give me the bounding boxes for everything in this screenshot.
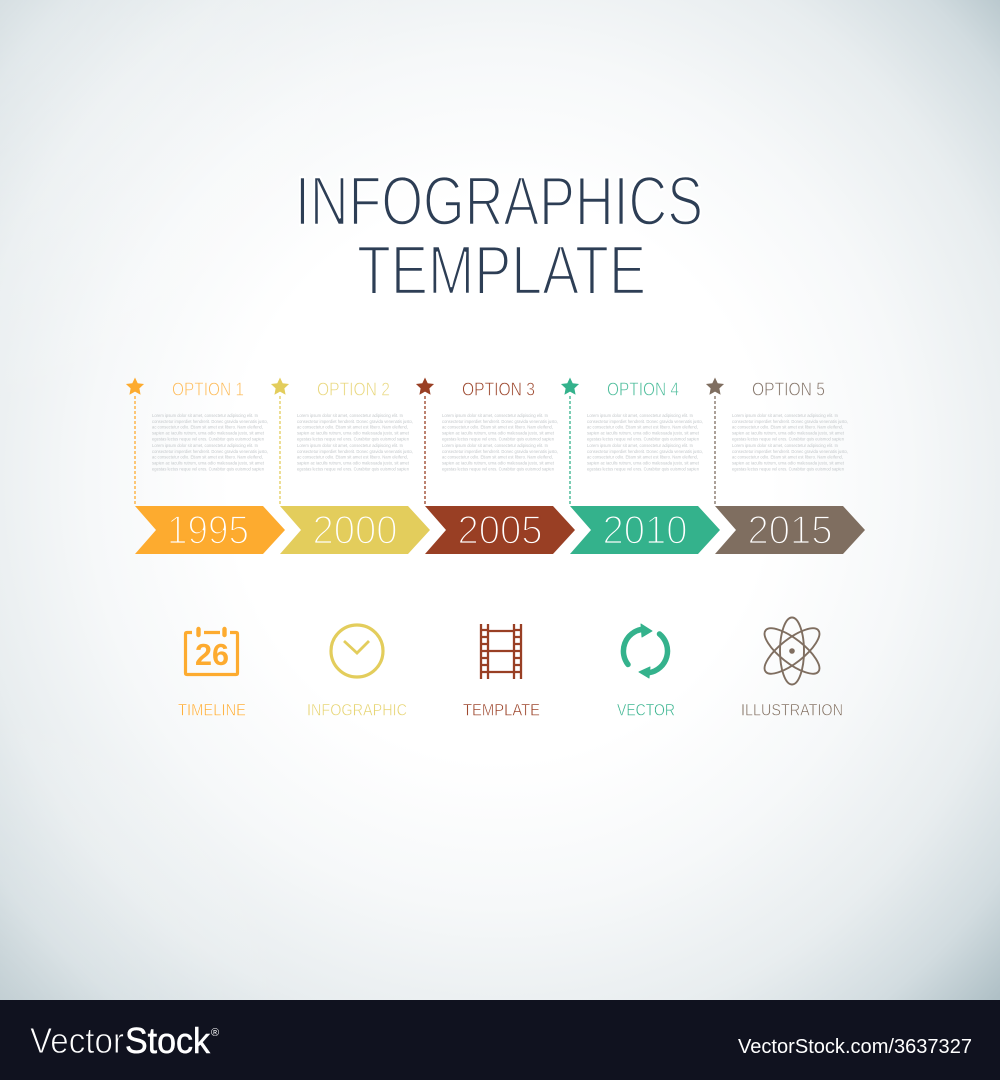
icon: refresh arrows (623, 624, 668, 678)
text block 1: sapien ac iaculis rutrum, urna odio malesuada justo, sit amet (152, 430, 265, 436)
footer logo: Stock (125, 1020, 211, 1061)
panel: option 1 1995 (126, 378, 285, 554)
arrow 2005: 2005 (458, 509, 542, 553)
text block 1: consectetur imperdiet hendrerit. Donec gravida venenatis justo, (152, 419, 268, 424)
text block 4: ac consectetur odio. Etiam sit amet est libero. Nam eleifend, (587, 424, 698, 430)
footer bar (0, 1000, 1000, 1080)
text block 3: Lorem ipsum dolor sit amet, consectetur adipiscing elit. In (442, 443, 548, 448)
heading: option 2: OPTION 2 (317, 379, 390, 399)
connector with star 1 (126, 378, 144, 506)
panel: option 4 2010 (561, 378, 720, 554)
text block 2: egestas lectus neque vel eros. Curabitur quis euismod sapien (297, 436, 409, 442)
text block 5: consectetur imperdiet hendrerit. Donec gravida venenatis justo, (732, 419, 848, 424)
connector with star 4 (561, 378, 579, 506)
panel: option 3 2005 (416, 378, 575, 554)
text block 1 (152, 413, 268, 472)
panel: option 2 2000 (271, 378, 430, 554)
text block 5 (732, 413, 848, 472)
arrow 1995 (135, 506, 285, 554)
text block 2: consectetur imperdiet hendrerit. Donec gravida venenatis justo, (297, 419, 413, 424)
text block 2: ac consectetur odio. Etiam sit amet est libero. Nam eleifend, (297, 424, 408, 430)
text block 4: egestas lectus neque vel eros. Curabitur quis euismod sapien (587, 466, 699, 472)
text block 1: consectetur imperdiet hendrerit. Donec gravida venenatis justo, (152, 449, 268, 454)
text block 5: egestas lectus neque vel eros. Curabitur quis euismod sapien (732, 436, 844, 442)
label: illustration: ILLUSTRATION (741, 701, 843, 719)
text block 3: Lorem ipsum dolor sit amet, consectetur adipiscing elit. In (442, 413, 548, 418)
text block 2: sapien ac iaculis rutrum, urna odio malesuada justo, sit amet (297, 460, 410, 466)
heading: option 5: OPTION 5 (752, 379, 825, 399)
text block 4: ac consectetur odio. Etiam sit amet est libero. Nam eleifend, (587, 454, 698, 460)
text block 4: consectetur imperdiet hendrerit. Donec gravida venenatis justo, (587, 449, 703, 454)
text block 1: sapien ac iaculis rutrum, urna odio malesuada justo, sit amet (152, 460, 265, 466)
label: timeline: TIMELINE (178, 701, 246, 719)
heading: option 1: OPTION 1 (172, 379, 244, 399)
arrow 2015: 2015 (748, 509, 832, 553)
title: INFOGRAPHICS (295, 162, 703, 240)
label: infographic: INFOGRAPHIC (307, 701, 407, 719)
text block 2: Lorem ipsum dolor sit amet, consectetur adipiscing elit. In (297, 413, 403, 418)
text block 3: sapien ac iaculis rutrum, urna odio malesuada justo, sit amet (442, 460, 555, 466)
text block 3: consectetur imperdiet hendrerit. Donec gravida venenatis justo, (442, 449, 558, 454)
text block 5: ac consectetur odio. Etiam sit amet est libero. Nam eleifend, (732, 454, 843, 460)
text block 4: consectetur imperdiet hendrerit. Donec gravida venenatis justo, (587, 419, 703, 424)
text block 4: sapien ac iaculis rutrum, urna odio malesuada justo, sit amet (587, 460, 700, 466)
text block 5: egestas lectus neque vel eros. Curabitur quis euismod sapien (732, 466, 844, 472)
text block 4 (587, 413, 703, 472)
arrow 2015 (715, 506, 865, 554)
connector with star 3 (416, 378, 434, 506)
text block 4: sapien ac iaculis rutrum, urna odio malesuada justo, sit amet (587, 430, 700, 436)
footer logo: ® (211, 1027, 219, 1039)
text block 1: egestas lectus neque vel eros. Curabitur quis euismod sapien (152, 436, 264, 442)
arrow 2010: 2010 (602, 509, 688, 553)
text block 1: Lorem ipsum dolor sit amet, consectetur adipiscing elit. In (152, 413, 258, 418)
label: vector: VECTOR (617, 701, 675, 719)
arrow 2000 (280, 506, 430, 554)
text block 5: sapien ac iaculis rutrum, urna odio malesuada justo, sit amet (732, 430, 845, 436)
text block 4: egestas lectus neque vel eros. Curabitur quis euismod sapien (587, 436, 699, 442)
text block 2: consectetur imperdiet hendrerit. Donec gravida venenatis justo, (297, 449, 413, 454)
heading: option 3: OPTION 3 (462, 379, 535, 399)
text block 2 (297, 413, 413, 472)
arrow 1995: 1995 (167, 509, 249, 553)
connector with star 2 (271, 378, 289, 506)
text block 4: Lorem ipsum dolor sit amet, consectetur adipiscing elit. In (587, 443, 693, 448)
arrow 2005 (425, 506, 575, 554)
footer logo (30, 1020, 219, 1061)
arrow 2000: 2000 (312, 509, 398, 553)
heading: option 4: OPTION 4 (607, 379, 679, 399)
icon: film strip (481, 624, 521, 679)
text block 3: egestas lectus neque vel eros. Curabitur quis euismod sapien (442, 436, 554, 442)
text block 1: ac consectetur odio. Etiam sit amet est libero. Nam eleifend, (152, 454, 263, 460)
text block 5: consectetur imperdiet hendrerit. Donec gravida venenatis justo, (732, 449, 848, 454)
connector with star 5 (706, 378, 724, 506)
text block 3: ac consectetur odio. Etiam sit amet est libero. Nam eleifend, (442, 424, 553, 430)
text block 1: ac consectetur odio. Etiam sit amet est libero. Nam eleifend, (152, 424, 263, 430)
icon: calendar: 26 (195, 637, 229, 672)
text block 3: egestas lectus neque vel eros. Curabitur quis euismod sapien (442, 466, 554, 472)
panel: option 5 2015 (706, 378, 865, 554)
arrow 2010 (570, 506, 720, 554)
text block 4: Lorem ipsum dolor sit amet, consectetur adipiscing elit. In (587, 413, 693, 418)
text block 5: Lorem ipsum dolor sit amet, consectetur adipiscing elit. In (732, 443, 838, 448)
text block 3 (442, 413, 558, 472)
text block 5: ac consectetur odio. Etiam sit amet est libero. Nam eleifend, (732, 424, 843, 430)
text block 1: egestas lectus neque vel eros. Curabitur quis euismod sapien (152, 466, 264, 472)
icon: clock circle with chevron (331, 625, 383, 677)
title (295, 162, 703, 309)
text block 3: sapien ac iaculis rutrum, urna odio malesuada justo, sit amet (442, 430, 555, 436)
text block 2: sapien ac iaculis rutrum, urna odio malesuada justo, sit amet (297, 430, 410, 436)
title: TEMPLATE (357, 231, 646, 309)
text block 1: Lorem ipsum dolor sit amet, consectetur adipiscing elit. In (152, 443, 258, 448)
text block 5: Lorem ipsum dolor sit amet, consectetur adipiscing elit. In (732, 413, 838, 418)
text block 2: egestas lectus neque vel eros. Curabitur quis euismod sapien (297, 466, 409, 472)
text block 2: ac consectetur odio. Etiam sit amet est libero. Nam eleifend, (297, 454, 408, 460)
text block 5: sapien ac iaculis rutrum, urna odio malesuada justo, sit amet (732, 460, 845, 466)
icon: calendar (186, 629, 238, 674)
text block 2: Lorem ipsum dolor sit amet, consectetur adipiscing elit. In (297, 443, 403, 448)
text block 3: ac consectetur odio. Etiam sit amet est libero. Nam eleifend, (442, 454, 553, 460)
label: template: TEMPLATE (463, 701, 540, 719)
text block 3: consectetur imperdiet hendrerit. Donec gravida venenatis justo, (442, 419, 558, 424)
footer logo: Vector (30, 1020, 124, 1061)
icon: atom (758, 618, 826, 684)
footer image id: VectorStock.com/3637327 (738, 1036, 972, 1058)
